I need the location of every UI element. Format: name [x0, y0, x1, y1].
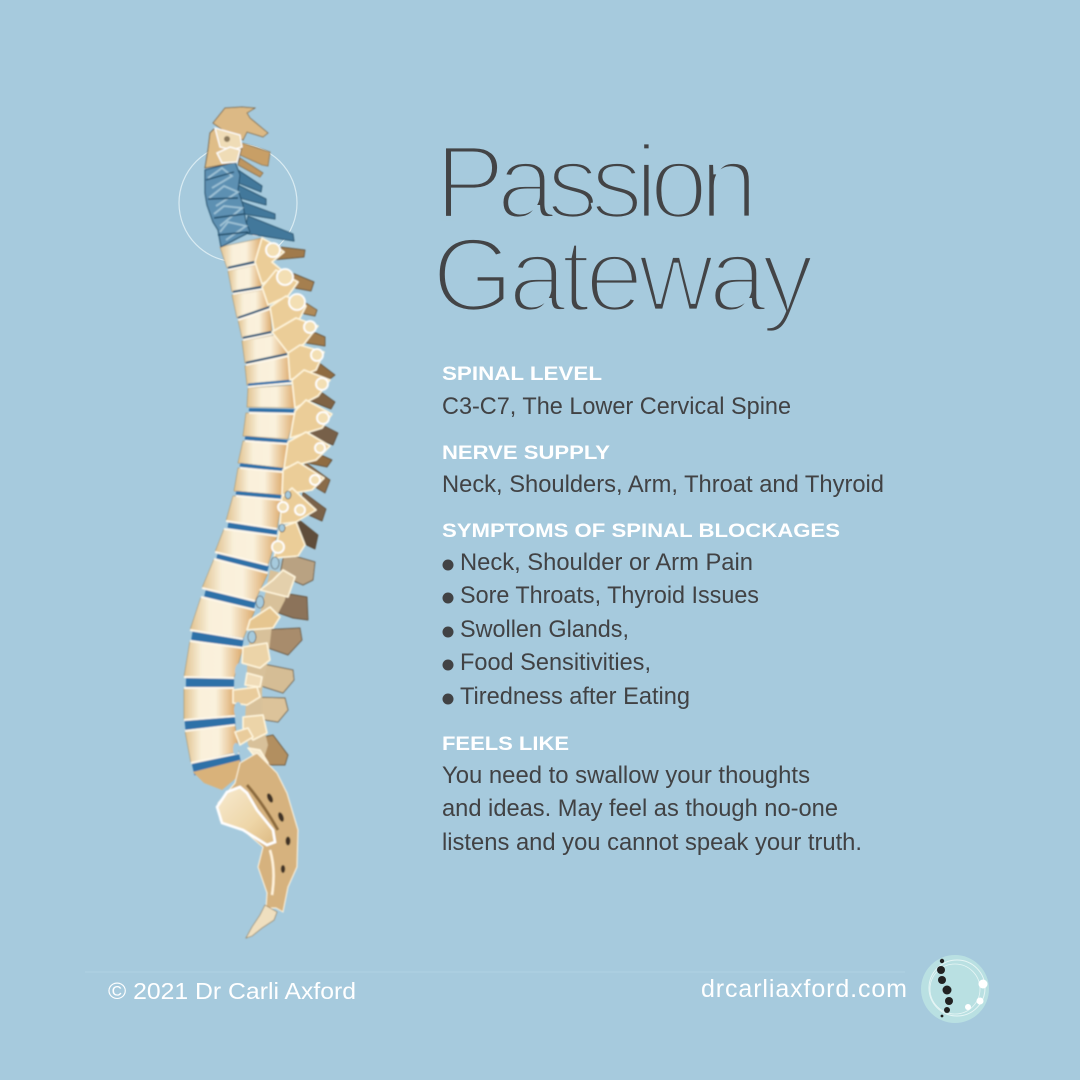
sacrum and coccyx: [193, 753, 298, 938]
highlight ring around cervical spine: [179, 144, 297, 262]
lumbar articular column: [245, 570, 290, 765]
section: spinal level: [442, 363, 791, 420]
website address: drcarliaxford.com: [701, 975, 907, 1003]
section: feels like: FEELS LIKE: [442, 733, 569, 755]
articular processes and facets: [233, 221, 332, 767]
section: symptoms of spinal blockages: Swollen Glands,: [460, 616, 629, 643]
upper cervical vertebrae C1 and C2: [205, 107, 270, 177]
icon: logo with spine dots: [921, 955, 989, 1023]
section: feels like: and ideas. May feel as though no-one: [442, 795, 838, 822]
section: symptoms of spinal blockages: SYMPTOMS OF SPINAL BLOCKAGES: [442, 520, 840, 542]
section: nerve supply: NERVE SUPPLY: [442, 442, 610, 464]
section: spinal level: C3-C7, The Lower Cervical Spine: [442, 393, 791, 420]
section: spinal level: SPINAL LEVEL: [442, 363, 602, 385]
section: feels like: [442, 733, 862, 856]
copyright footer: © 2021 Dr Carli Axford: [108, 978, 356, 1004]
section: symptoms of spinal blockages: Tiredness after Eating: [460, 683, 690, 710]
blue highlighted cervical vertebrae: [205, 162, 294, 247]
section: feels like: listens and you cannot speak your truth.: [442, 829, 862, 856]
section: symptoms of spinal blockages: Sore Throats, Thyroid Issues: [460, 582, 759, 609]
spinous processes: [248, 246, 338, 765]
section: symptoms of spinal blockages: [442, 520, 840, 710]
section: nerve supply: Neck, Shoulders, Arm, Throat and Thyroid: [442, 471, 884, 498]
vertebral bodies: [184, 238, 295, 763]
section: feels like: You need to swallow your thoughts: [442, 762, 810, 789]
spine illustration: [184, 107, 338, 938]
intervertebral discs: [184, 262, 295, 769]
section: symptoms of spinal blockages: Neck, Shoulder or Arm Pain: [460, 549, 753, 576]
title: Gateway: [432, 217, 814, 334]
section: symptoms of spinal blockages: Food Sensitivities,: [460, 649, 651, 676]
title: Passion: [435, 124, 758, 241]
title: [432, 124, 814, 334]
section: nerve supply: [442, 442, 884, 498]
